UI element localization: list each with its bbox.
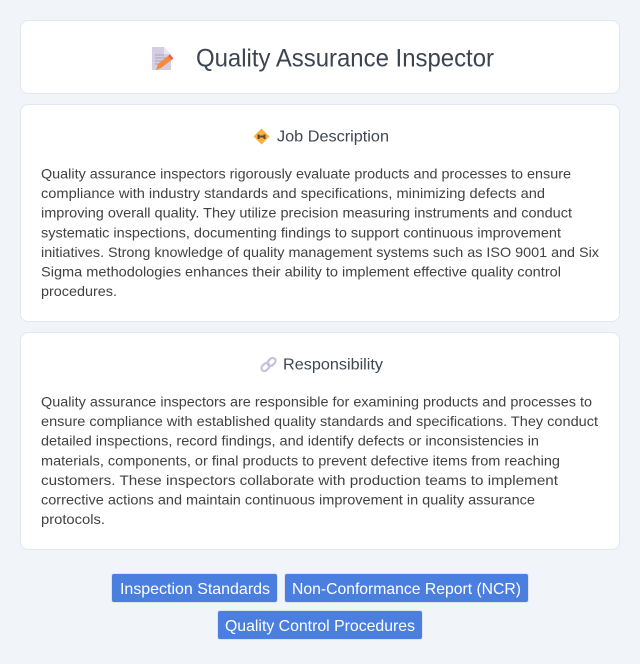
tag: quality control procedures: [217, 610, 423, 640]
text block: responsibility: customers. These inspectors collaborate with production teams to implement: [41, 472, 558, 488]
icon: link: [260, 356, 277, 372]
panel: job description: [20, 104, 620, 322]
text block: responsibility: Quality assurance inspectors are responsible for examining products and processes to: [41, 394, 592, 410]
text block: job description: [41, 166, 599, 299]
text block: responsibility: protocols.: [41, 511, 105, 527]
text block: responsibility: corrective actions and maintain continuous improvement in quality assurance: [41, 492, 535, 508]
heading: responsibility: Responsibility: [283, 356, 383, 374]
text block: job description: compliance with industry standards and specifications, minimizing defects and: [41, 185, 545, 201]
title: Quality Assurance Inspector: [196, 44, 494, 72]
text block: job description: improving overall quality. They utilize precision measuring instruments and conduct: [41, 204, 572, 220]
icon: diamond sign: [254, 128, 270, 144]
heading: job description: Job Description: [277, 128, 389, 146]
tags: [111, 573, 529, 640]
text block: job description: initiatives. Strong knowledge of quality management systems such as ISO 9001 and Six: [41, 244, 599, 260]
text block: job description: Sigma methodologies enhances their ability to implement effective quality control: [41, 264, 561, 280]
icon: document with pencil: [152, 47, 174, 70]
panel: responsibility: [20, 332, 620, 550]
text block: responsibility: ensure compliance with established quality standards and specifications. They conduct: [41, 413, 598, 429]
tag: inspection standards: Inspection Standards: [120, 581, 270, 598]
tag: non-conformance report: Non-Conformance Report (NCR): [292, 581, 521, 598]
tag: quality control procedures: Quality Control Procedures: [225, 618, 415, 635]
text block: job description: systematic inspections, documenting findings to support continuous improvement: [41, 224, 561, 240]
text block: responsibility: materials, components, or final products to prevent defective items from reaching: [41, 452, 560, 468]
tag: inspection standards: [111, 573, 278, 603]
panel: title card: [20, 20, 620, 94]
text block: job description: procedures.: [41, 283, 117, 299]
text block: responsibility: [41, 394, 598, 527]
text block: responsibility: detailed inspections, record findings, and identify defects or inconsistencies in: [41, 432, 539, 448]
tag: non-conformance report: [284, 573, 529, 603]
text block: job description: Quality assurance inspectors rigorously evaluate products and processes to ensure: [41, 166, 571, 182]
